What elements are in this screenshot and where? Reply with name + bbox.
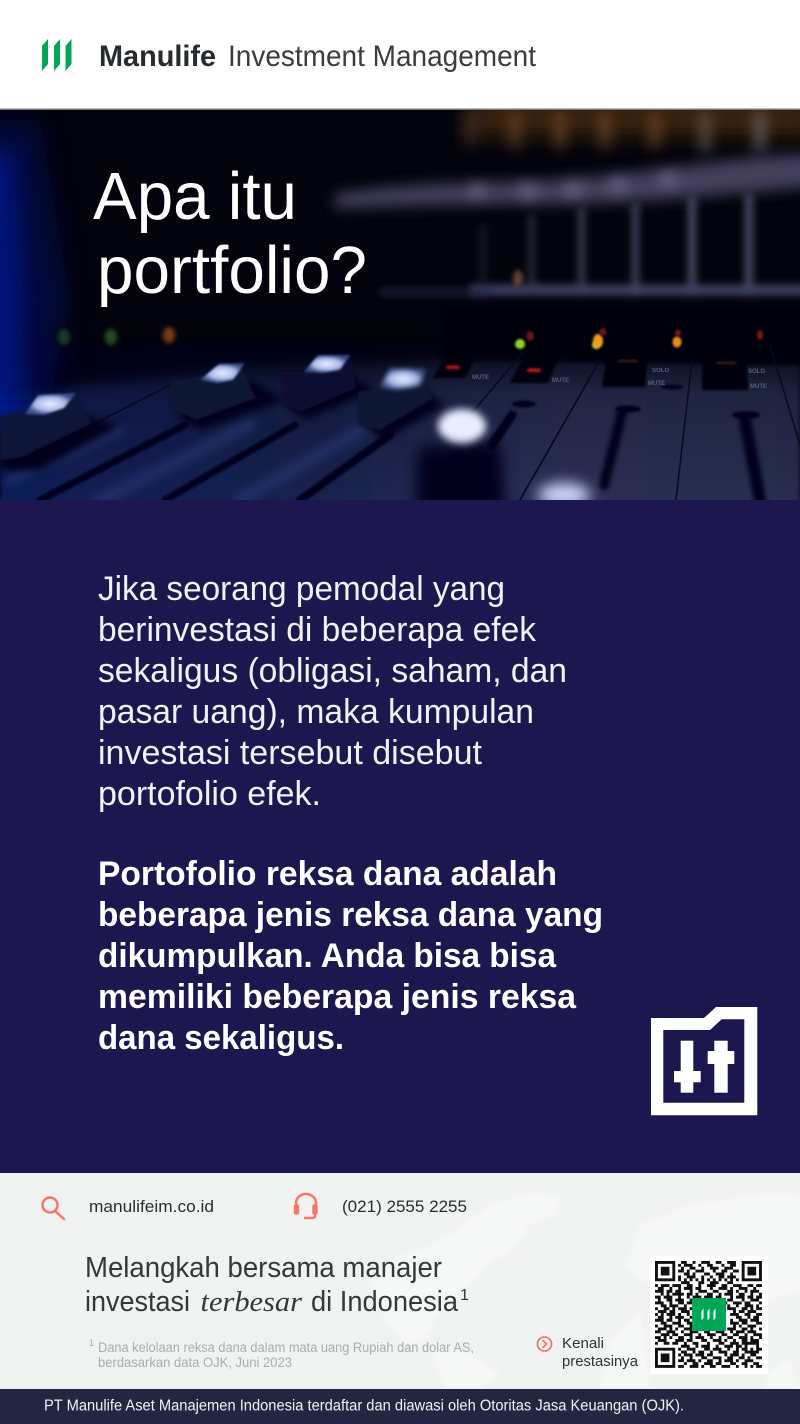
fader tracks xyxy=(36,410,768,500)
lower blurred band xyxy=(470,285,800,295)
QR caption: prestasinya xyxy=(562,1354,639,1370)
paragraph: definition of securities portfolio: berinvestasi di beberapa efek xyxy=(98,611,537,649)
mute buttons xyxy=(433,358,749,391)
logo wordmark: Manulife xyxy=(99,40,216,73)
paragraph: definition of securities portfolio: portofolio efek. xyxy=(98,775,321,813)
LED indicators xyxy=(58,327,763,349)
paragraph: definition of mutual fund portfolio: beberapa jenis reksa dana yang xyxy=(98,896,603,934)
icon: arrow circle xyxy=(538,1337,552,1351)
icon: Manulife green stripes xyxy=(42,39,72,71)
deck labels: MUTE xyxy=(648,381,665,387)
tagline: investasi xyxy=(85,1286,190,1318)
footnote: berdasarkan data OJK, Juni 2023 xyxy=(98,1355,292,1370)
deck labels: MUTE xyxy=(750,384,767,390)
knob 2 xyxy=(170,363,285,430)
deck labels: SOLO xyxy=(652,368,669,374)
paragraph: definition of mutual fund portfolio xyxy=(98,855,603,1057)
paragraph: definition of securities portfolio: sekaligus (obligasi, saham, dan xyxy=(98,652,567,690)
tagline: di Indonesia xyxy=(311,1286,459,1318)
vertical blurred strips xyxy=(480,194,753,292)
icon: search xyxy=(42,1198,64,1219)
knob 4 xyxy=(358,368,445,440)
foreground blurred knob xyxy=(416,409,506,510)
track slots xyxy=(512,400,536,408)
tagline xyxy=(85,1252,469,1318)
world map watermark xyxy=(370,1193,800,1389)
logo descriptor: Investment Management xyxy=(228,40,537,73)
title xyxy=(93,159,367,308)
blurred top band xyxy=(335,100,800,295)
dark top of channel strips xyxy=(440,358,800,365)
footnote xyxy=(89,1338,474,1370)
deck labels: SOLO xyxy=(748,369,765,375)
paragraph: definition of securities portfolio: pasar uang), maka kumpulan xyxy=(98,693,534,731)
icon: headset xyxy=(294,1194,317,1218)
knob 1 xyxy=(0,393,120,470)
paragraph: definition of securities portfolio xyxy=(98,570,567,813)
paragraph: definition of mutual fund portfolio: Portofolio reksa dana adalah xyxy=(98,855,557,893)
footnote: 1 xyxy=(89,1338,94,1348)
tagline: 1 xyxy=(460,1287,469,1304)
left blue glow xyxy=(0,120,70,420)
deck labels xyxy=(472,368,767,390)
channel dividers xyxy=(92,345,800,500)
panel: explanation xyxy=(0,500,800,1173)
website: manulifeim.co.id xyxy=(89,1198,214,1216)
lighter diagonal strips xyxy=(10,425,370,500)
paragraph: definition of mutual fund portfolio: dikumpulkan. Anda bisa bisa xyxy=(98,937,557,975)
paragraph: definition of mutual fund portfolio: memiliki beberapa jenis reksa xyxy=(98,978,577,1016)
console deck xyxy=(0,344,800,500)
QR caption xyxy=(562,1336,639,1370)
dark shade behind faders xyxy=(30,354,430,398)
paragraph: definition of securities portfolio: investasi tersebut disebut xyxy=(98,734,483,772)
title: portfolio? xyxy=(97,233,367,308)
QR centre logo xyxy=(692,1298,726,1331)
tagline: terbesar xyxy=(200,1286,303,1318)
tagline: Melangkah bersama manajer xyxy=(85,1252,442,1284)
icon: folder with sliders xyxy=(651,1007,757,1115)
bottom glare xyxy=(538,483,590,507)
QR caption: Kenali xyxy=(562,1336,604,1352)
knob 3 xyxy=(281,355,375,420)
panel: contact footer xyxy=(0,1173,800,1389)
paragraph: definition of mutual fund portfolio: dana sekaligus. xyxy=(98,1019,344,1057)
phone number: (021) 2555 2255 xyxy=(342,1198,467,1216)
footnote: Dana kelolaan reksa dana dalam mata uang Rupiah dan dolar AS, xyxy=(98,1340,474,1355)
deck labels: MUTE xyxy=(552,378,569,384)
paragraph: definition of securities portfolio: Jika seorang pemodal yang xyxy=(98,570,505,608)
footer bar: regulatory statement xyxy=(0,1389,800,1424)
QR code xyxy=(650,1256,768,1374)
hero: mixing console photo xyxy=(0,100,800,510)
fader knobs xyxy=(0,355,590,510)
header: logo xyxy=(42,39,537,73)
footer bar: regulatory statement: PT Manulife Aset Manajemen Indonesia terdaftar dan diawasi oleh Otoritas Jasa Keuangan (OJK). xyxy=(44,1398,684,1414)
deck labels: MUTE xyxy=(472,375,489,381)
title: Apa itu xyxy=(93,159,297,234)
